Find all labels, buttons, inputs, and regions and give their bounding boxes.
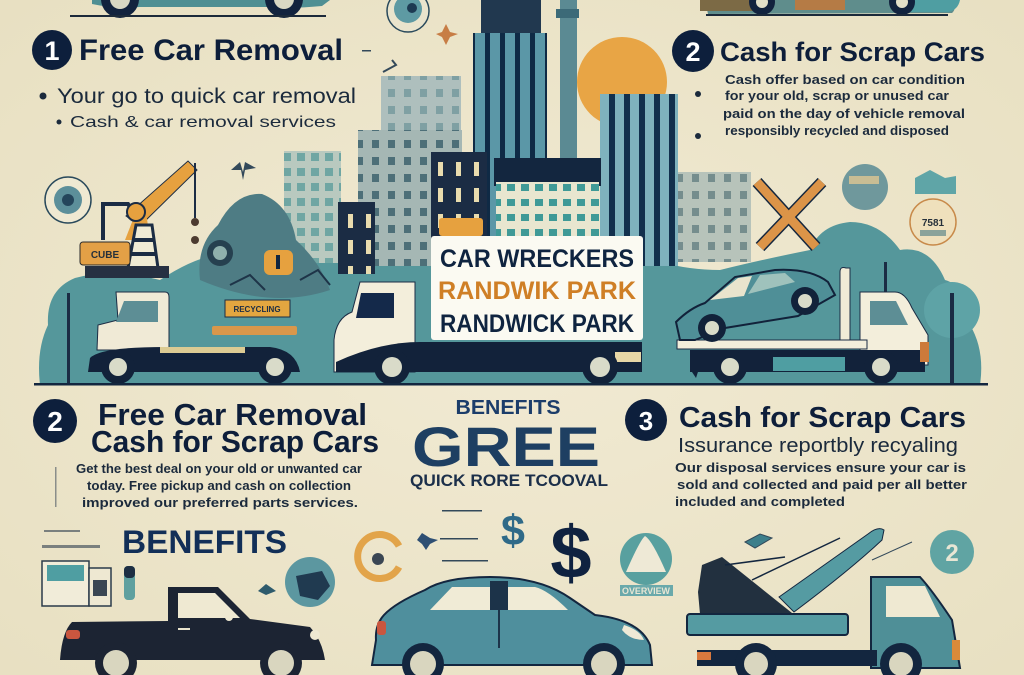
benefits heading: BENEFITS bbox=[122, 524, 287, 560]
icon: small dollar: $ bbox=[501, 507, 525, 555]
top icon circle bbox=[387, 0, 429, 32]
center benefits badge: GREE bbox=[412, 415, 600, 478]
section 2 lower: free car removal + cash for scrap cars: improved our preferred parts services. bbox=[82, 495, 358, 510]
icon: teal number badge bbox=[930, 530, 974, 574]
section 2: cash for scrap cars bbox=[672, 30, 985, 139]
center benefits badge: QUICK RORE TCOOVAL bbox=[410, 471, 608, 490]
section 2: cash for scrap cars: responsibly recycled and disposed bbox=[725, 123, 949, 138]
center benefits badge bbox=[410, 397, 608, 490]
section 3: cash for scrap cars: Our disposal services ensure your car is bbox=[675, 460, 966, 475]
right floating icons: 7581 bbox=[922, 218, 945, 229]
section 3: cash for scrap cars: Cash for Scrap Cars bbox=[679, 402, 966, 434]
orange X mark bbox=[757, 182, 822, 247]
section 2 lower: free car removal + cash for scrap cars: Free Car Removal bbox=[98, 397, 367, 432]
section 3: cash for scrap cars bbox=[625, 399, 967, 509]
ground line bbox=[34, 383, 988, 386]
trees bbox=[67, 262, 980, 383]
section 1: free car removal: Cash & car removal services bbox=[70, 114, 336, 131]
section 2 lower: free car removal + cash for scrap cars: today. Free pickup and cash on collection bbox=[87, 478, 351, 493]
crane bbox=[45, 161, 199, 278]
top-right car (cropped) bbox=[700, 0, 960, 16]
left tow truck bbox=[88, 292, 300, 384]
section 3: cash for scrap cars: sold and collected and paid per all better bbox=[677, 477, 967, 492]
skyline: central towers bbox=[338, 0, 678, 274]
section 2: cash for scrap cars: for your old, scrap or unused car bbox=[725, 88, 949, 103]
section 2 lower: free car removal + cash for scrap cars: 2 bbox=[47, 406, 63, 437]
section 1: free car removal: Free Car Removal bbox=[79, 34, 343, 67]
decorative small marks bbox=[745, 534, 912, 560]
teal sedan bbox=[372, 577, 652, 675]
skyline: pale and grey buildings bbox=[284, 76, 751, 266]
right flatbed truck with car bbox=[676, 268, 929, 384]
section 2: cash for scrap cars: paid on the day of vehicle removal bbox=[723, 106, 965, 121]
section 1: free car removal bbox=[32, 30, 356, 131]
section 3: cash for scrap cars: included and completed bbox=[675, 494, 845, 509]
icon: teal number badge: 2 bbox=[945, 540, 959, 567]
title sign: RANDWICK PARK bbox=[440, 310, 634, 338]
icon: teal emblem: OVERVIEW bbox=[622, 586, 670, 596]
icon: orange c badge bbox=[358, 534, 399, 579]
section 2 lower: free car removal + cash for scrap cars: Get the best deal on your old or unwanted car bbox=[76, 461, 362, 476]
dark rubble mound bbox=[199, 194, 330, 298]
right floating icons bbox=[842, 164, 956, 245]
title sign: CAR WRECKERS bbox=[440, 245, 634, 273]
section 2: cash for scrap cars: 2 bbox=[685, 37, 701, 67]
section 3: cash for scrap cars: Issurance reportbly recyaling bbox=[678, 435, 958, 457]
section 2: cash for scrap cars: Cash offer based on car condition bbox=[725, 72, 965, 87]
section 2 lower: free car removal + cash for scrap cars bbox=[33, 397, 379, 510]
sun bbox=[577, 37, 667, 127]
section 1: free car removal: Your go to quick car removal bbox=[57, 85, 356, 108]
center benefits badge: BENEFITS bbox=[456, 397, 560, 419]
section 2 lower: free car removal + cash for scrap cars: Cash for Scrap Cars bbox=[91, 424, 379, 459]
left tow truck: RECYCLING bbox=[233, 305, 281, 314]
decorative sparkles bbox=[231, 24, 458, 180]
teal hills bbox=[39, 222, 981, 385]
tow truck bbox=[687, 529, 960, 675]
center truck bbox=[334, 282, 642, 385]
section 2: cash for scrap cars: Cash for Scrap Cars bbox=[720, 37, 985, 67]
section 1: free car removal: 1 bbox=[44, 36, 60, 66]
pickup truck bbox=[60, 587, 325, 675]
title sign bbox=[431, 236, 643, 340]
crane: CUBE bbox=[91, 250, 119, 261]
section 3: cash for scrap cars: 3 bbox=[639, 406, 653, 436]
title sign: RANDWIK PARK bbox=[438, 277, 636, 305]
decorative dashes and star bbox=[42, 510, 488, 562]
icon: teal gear badge bbox=[258, 557, 335, 607]
icon: payment machine bbox=[42, 561, 135, 606]
icon: large dollar: $ bbox=[550, 511, 592, 594]
top-left car (cropped) bbox=[70, 0, 330, 18]
icon: teal emblem bbox=[620, 533, 673, 596]
